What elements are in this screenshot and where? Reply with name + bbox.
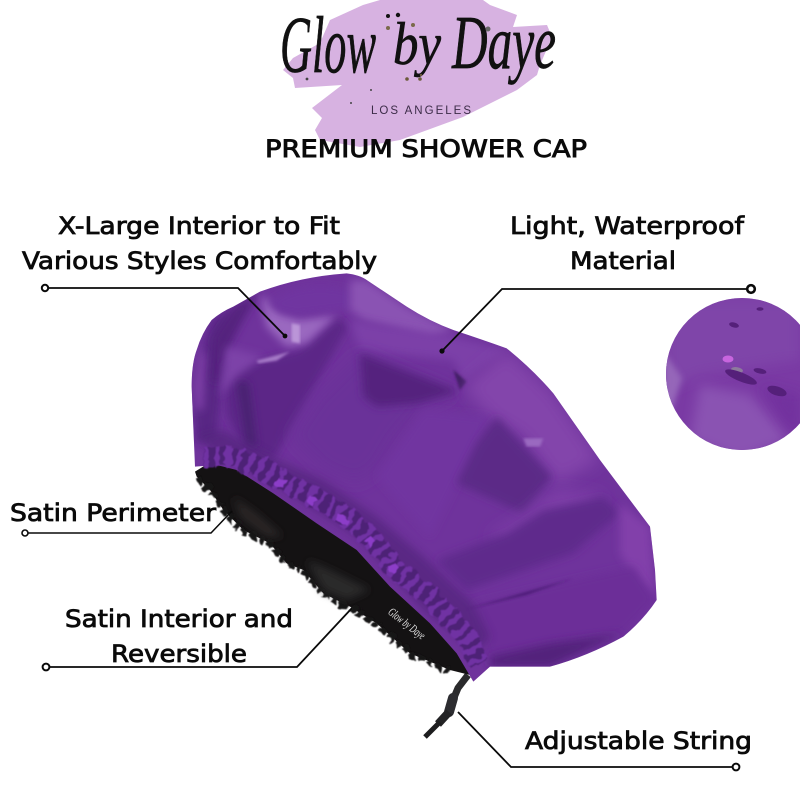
callout: satin interior and reversible: Satin Interior and <box>65 605 293 633</box>
logo script wordmark <box>280 1 556 90</box>
cap string <box>425 675 468 737</box>
callout: waterproof material: Light, Waterproof <box>510 212 745 240</box>
logo script wordmark: by <box>393 11 441 77</box>
cap purple shell <box>192 273 657 682</box>
logo brush stroke <box>283 0 552 147</box>
callout: x-large interior: X-Large Interior to Fit <box>58 212 340 240</box>
logo speckles <box>306 13 490 104</box>
logo script wordmark: Glow <box>280 2 376 90</box>
title: PREMIUM SHOWER CAP <box>265 135 587 163</box>
cap black satin interior <box>195 450 477 675</box>
callout: satin interior and reversible <box>43 605 352 670</box>
cap tag logo: Glow by Daye <box>385 605 429 643</box>
callout: waterproof material <box>439 212 755 354</box>
logo script wordmark: Daye <box>451 1 556 85</box>
callout: x-large interior: Various Styles Comfortably <box>22 247 377 275</box>
callout: waterproof material: Material <box>570 247 676 275</box>
callout: satin perimeter <box>10 499 232 536</box>
logo subtitle: LOS ANGELES <box>371 105 471 117</box>
cap elastic ruffle edge <box>203 457 478 663</box>
shower cap photo <box>192 273 657 737</box>
callout: adjustable string: Adjustable String <box>525 727 752 755</box>
callout: satin interior and reversible: Reversible <box>111 640 247 668</box>
callout: satin perimeter: Satin Perimeter <box>10 499 216 527</box>
cap folds and shading <box>192 280 655 667</box>
logo: Glow by Daye Los Angeles <box>280 0 556 147</box>
callout: adjustable string <box>458 712 752 770</box>
callout: x-large interior <box>22 212 377 338</box>
water droplets <box>722 307 788 398</box>
detail circle: waterproof material <box>664 298 800 460</box>
